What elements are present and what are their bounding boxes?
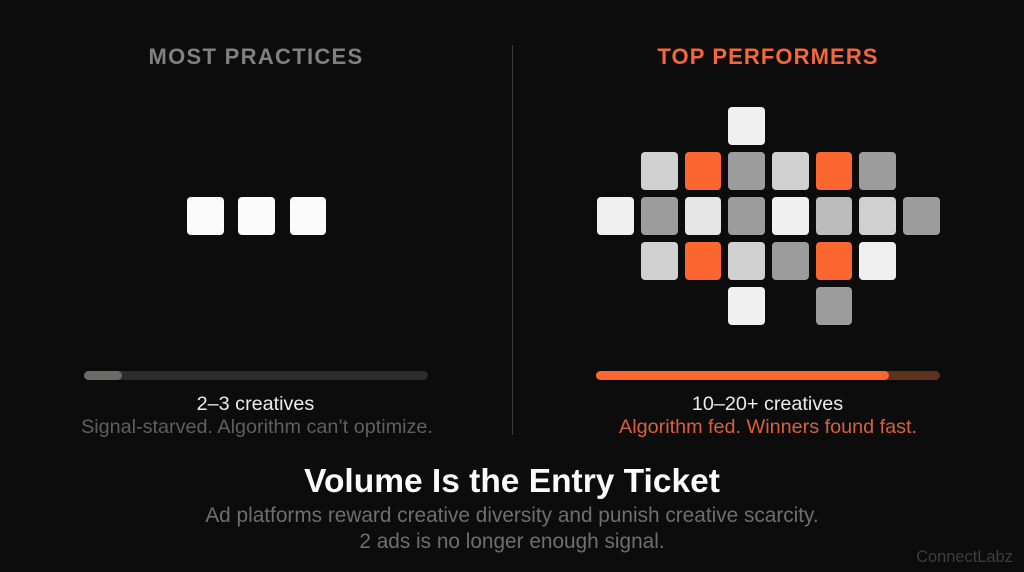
caption: algorithm fed: Algorithm fed. Winners found fast. [619, 416, 917, 438]
title: Volume Is the Entry Ticket [304, 463, 720, 500]
panel: most practices [81, 44, 433, 438]
watermark: ConnectLabz [916, 548, 1013, 566]
caption: signal-starved: Signal-starved. Algorithm can’t optimize. [81, 416, 433, 438]
panel: top performers [596, 44, 940, 438]
subtitle [205, 504, 819, 552]
vertical divider [512, 45, 513, 435]
progress bar: low volume [84, 371, 428, 380]
creative grid: many squares [597, 107, 940, 325]
label: 10-20+ creatives: 10–20+ creatives [692, 393, 843, 415]
heading: top performers: TOP PERFORMERS [657, 44, 879, 69]
progress bar: high volume [596, 371, 940, 380]
icon: three creative squares [187, 197, 326, 235]
heading: most practices: MOST PRACTICES [148, 44, 364, 69]
subtitle: Ad platforms reward creative diversity and punish creative scarcity. [205, 504, 819, 527]
label: 2-3 creatives: 2–3 creatives [197, 393, 314, 415]
subtitle: 2 ads is no longer enough signal. [359, 530, 665, 552]
